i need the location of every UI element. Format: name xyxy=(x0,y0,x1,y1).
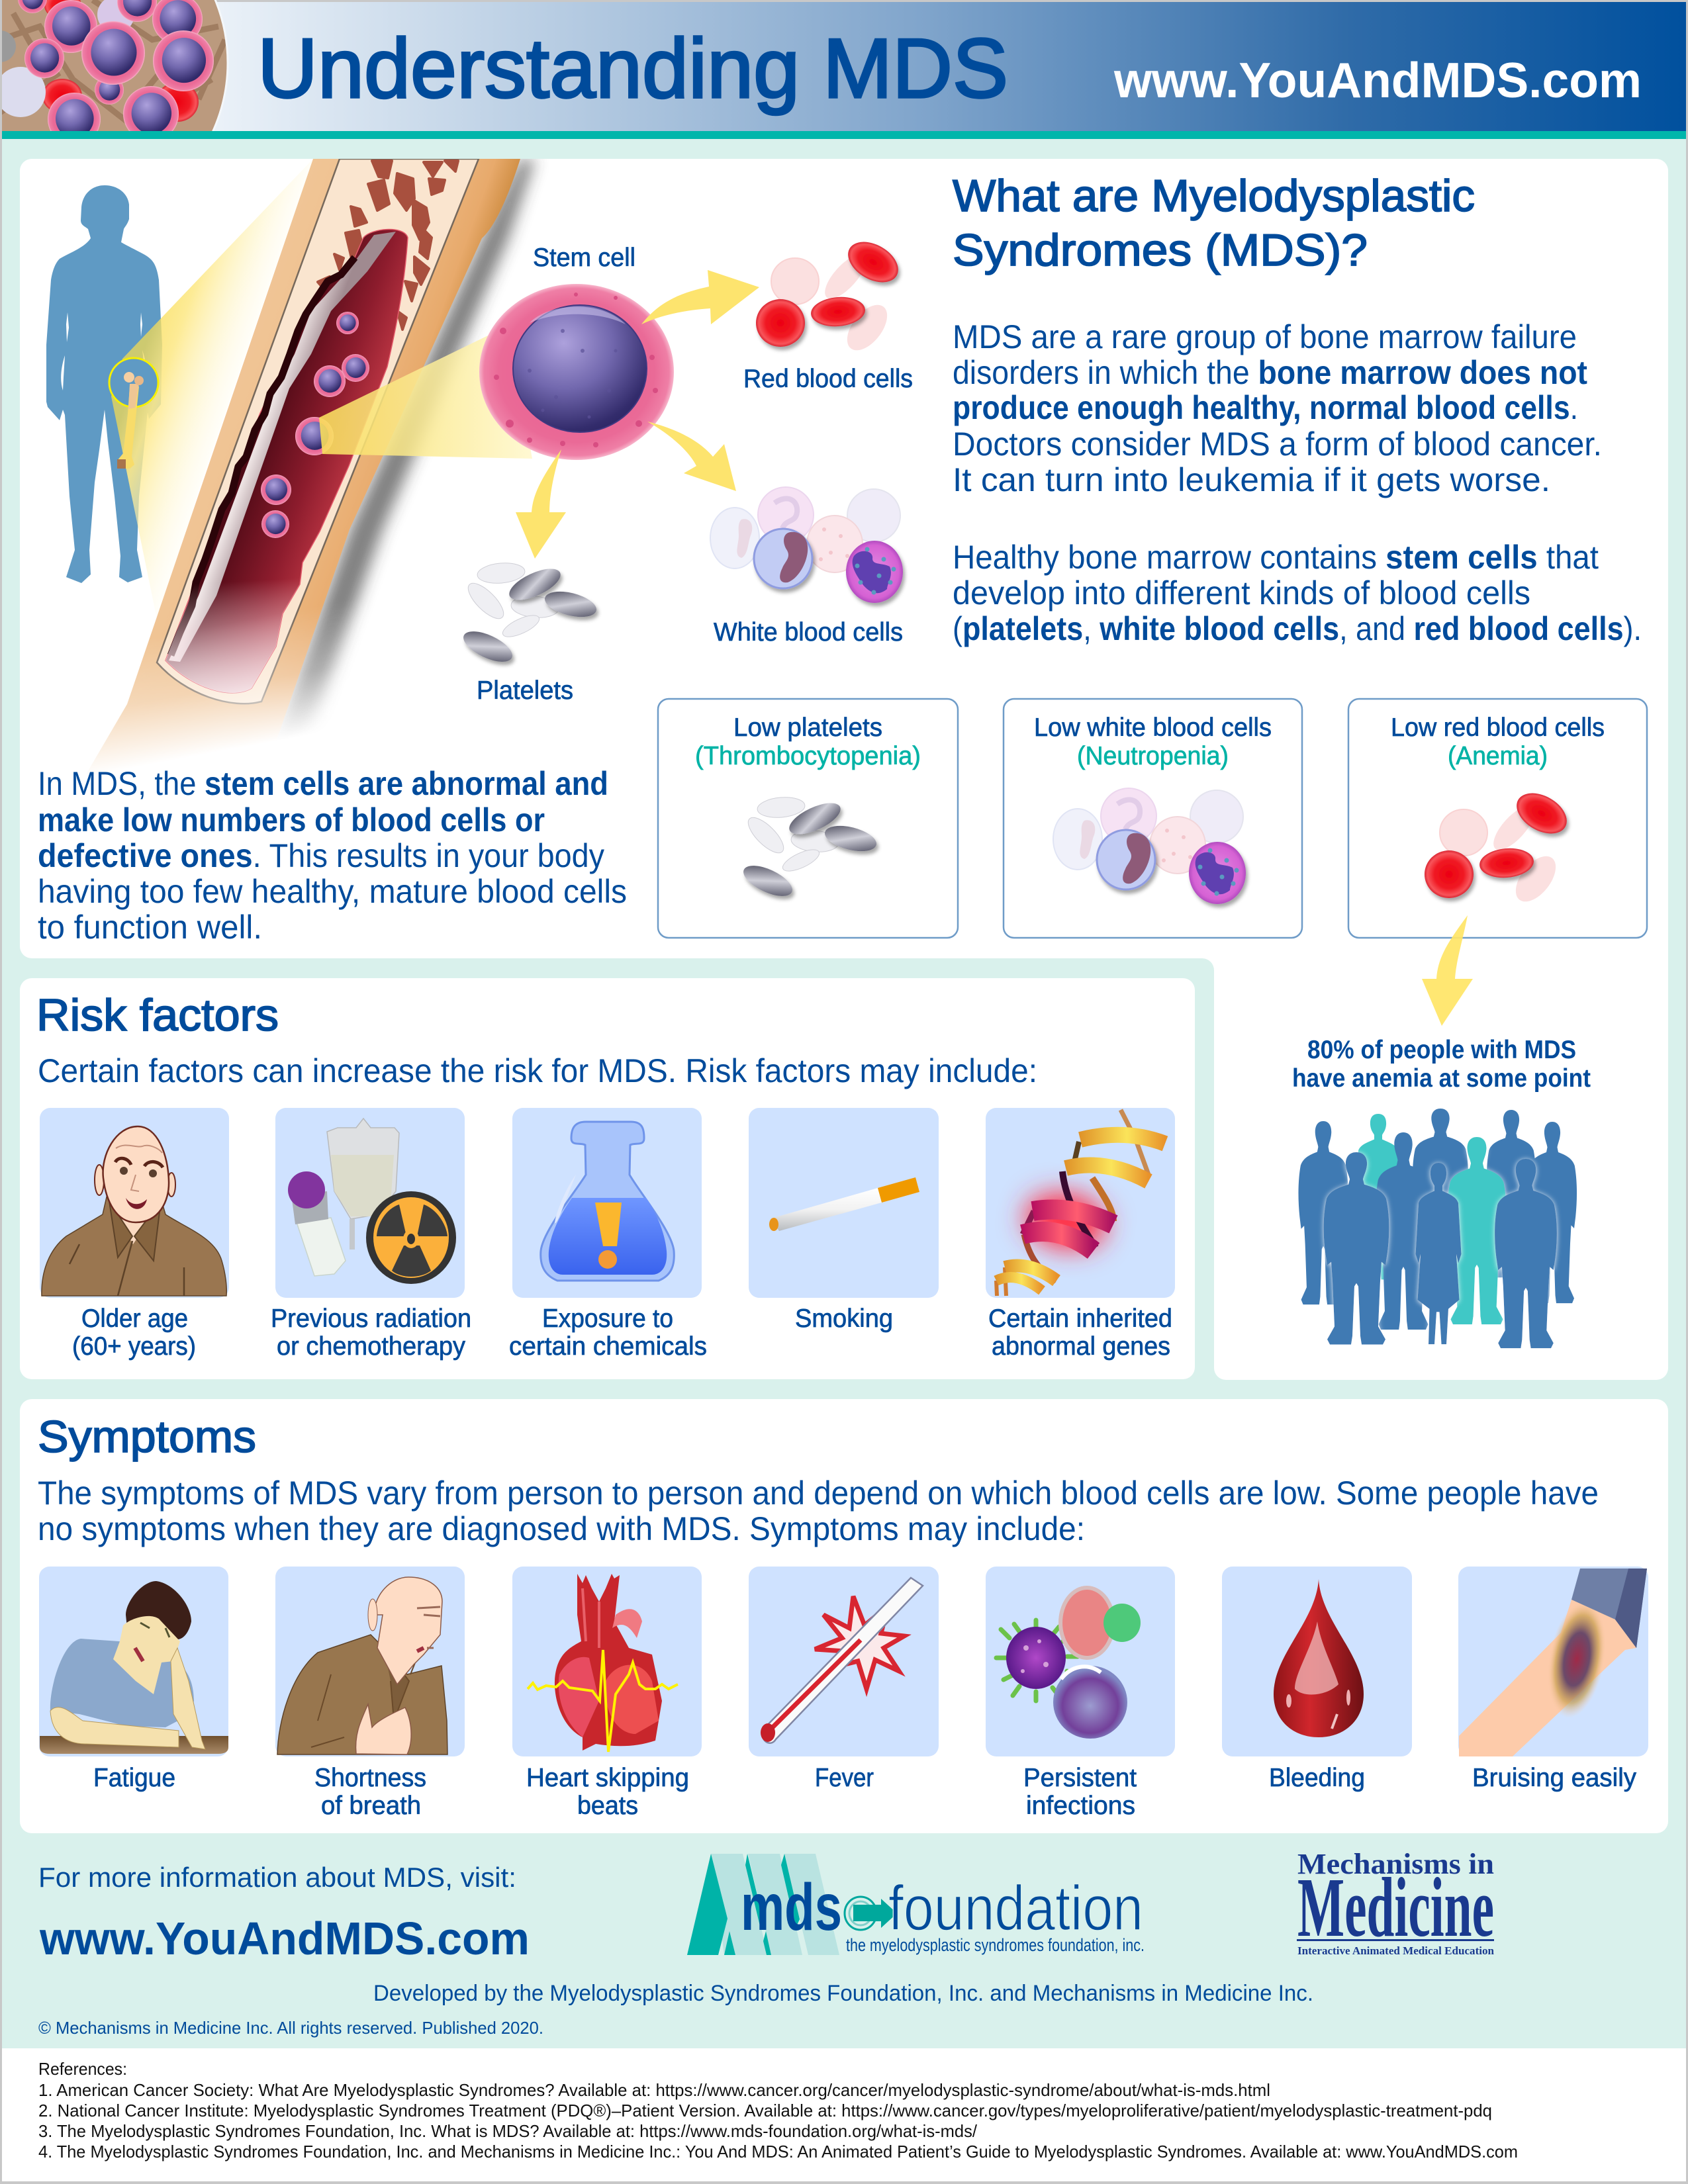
footer: more info: For more information about MDS, visit: xyxy=(38,1862,516,1893)
logo: MDS Foundation: the myelodysplastic syndromes foundation, inc. xyxy=(846,1935,1145,1955)
text: in MDS: having too few healthy, mature blood cells xyxy=(38,873,627,910)
panel: risk factors xyxy=(20,978,1195,1379)
risk: smoking xyxy=(749,1108,939,1298)
label: Heart skipping xyxy=(526,1764,689,1792)
panel: references: References: xyxy=(38,2059,127,2079)
header url: www.YouAndMDS.com xyxy=(1113,52,1642,108)
box: low platelets xyxy=(658,699,958,938)
bone cross-section xyxy=(86,159,535,774)
box: low platelets: (Thrombocytopenia) xyxy=(695,742,921,770)
label: Shortness xyxy=(314,1764,426,1792)
box: low red blood cells: (Anemia) xyxy=(1448,742,1548,770)
symptom: fever xyxy=(749,1567,939,1756)
label: Certain inherited xyxy=(988,1304,1172,1333)
box: low red blood cells: Low red blood cells xyxy=(1391,713,1605,742)
text: in MDS: to function well. xyxy=(38,909,262,946)
label xyxy=(72,1304,196,1361)
arrow: to white cells xyxy=(647,422,736,491)
blood vessel xyxy=(165,230,408,693)
panel: references: 1. American Cancer Society: What Are Myelodysplastic Syndromes? Available at: https://www.cancer.org/cancer/myelodysplastic-syndrome/about/what-is-mds.html xyxy=(38,2080,1270,2100)
arrow: to red cells xyxy=(641,270,759,324)
symptom: bleeding xyxy=(1222,1567,1412,1756)
header banner xyxy=(2,0,1686,139)
text: copyright: © Mechanisms in Medicine Inc. All rights reserved. Published 2020. xyxy=(38,2018,543,2038)
logo: Mechanisms in Medicine: Interactive Animated Medical Education xyxy=(1297,1944,1495,1957)
panel: references xyxy=(0,2048,1688,2184)
label: or chemotherapy xyxy=(277,1332,465,1361)
yellow beam to stem cell xyxy=(319,326,532,459)
arrow: to platelets xyxy=(516,449,566,559)
panel: references: 4. The Myelodysplastic Syndromes Foundation, Inc. and Mechanisms in Medicine Inc.: You And MDS: An Animated Patient’s Guide to Myelodysplastic Syndromes. Available at: www.YouAndMDS.com xyxy=(38,2142,1518,2161)
femur xyxy=(117,372,144,469)
text: in MDS: In MDS, the stem cells are abnormal and xyxy=(38,765,608,802)
icon: white blood cells xyxy=(710,487,903,603)
label xyxy=(314,1764,426,1820)
text: MDS definition: Doctors consider MDS a form of blood cancer. xyxy=(953,426,1602,463)
label: Bleeding xyxy=(1269,1764,1365,1792)
symptom: fatigue xyxy=(39,1567,228,1756)
heading: risk factors: Risk factors xyxy=(36,990,279,1040)
logo: Mechanisms in Medicine: Mechanisms in xyxy=(1297,1848,1494,1880)
text: healthy bone marrow: (platelets, white blood cells, and red blood cells). xyxy=(953,610,1642,647)
label xyxy=(509,1304,707,1361)
text: in MDS: make low numbers of blood cells or xyxy=(38,801,545,839)
risk: radiation or chemotherapy xyxy=(275,1108,465,1298)
label: red blood cells: Red blood cells xyxy=(743,365,913,393)
icon: red blood cells xyxy=(756,234,906,357)
logo: MDS Foundation: mds xyxy=(741,1870,842,1944)
label: white blood cells: White blood cells xyxy=(714,618,903,647)
symptom: infections xyxy=(986,1567,1175,1756)
logo: Mechanisms in Medicine xyxy=(1297,1848,1495,1957)
text: MDS definition: disorders in which the bone marrow does not xyxy=(953,354,1587,391)
footer: more info: www.YouAndMDS.com xyxy=(39,1913,530,1964)
arrow: anemia xyxy=(1422,915,1473,1026)
box: low white blood cells: Low white blood cells xyxy=(1034,713,1272,742)
panel: references: 3. The Myelodysplastic Syndromes Foundation, Inc. What is MDS? Available at: https://www.mds-foundation.org/what-is-mds/ xyxy=(38,2121,978,2141)
logo: Mechanisms in Medicine: Medicine xyxy=(1297,1860,1494,1954)
label: Persistent xyxy=(1023,1764,1137,1792)
text: healthy bone marrow: develop into different kinds of blood cells xyxy=(953,574,1530,612)
risk: chemicals xyxy=(512,1108,702,1298)
text: healthy bone marrow xyxy=(953,539,1642,647)
label xyxy=(988,1304,1172,1361)
text: risk intro: Certain factors can increase the risk for MDS. Risk factors may include: xyxy=(38,1052,1037,1089)
risk: genes xyxy=(986,1108,1175,1298)
heading: what are MDS: What are Myelodysplastic xyxy=(953,171,1475,221)
human silhouette with femur callout xyxy=(46,159,313,629)
box: low platelets: Low platelets xyxy=(733,713,882,742)
label: Fever xyxy=(815,1764,874,1792)
label: Exposure to xyxy=(542,1304,673,1333)
header image: bone marrow cells xyxy=(2,0,229,131)
text: symptoms intro: no symptoms when they are diagnosed with MDS. Symptoms may include: xyxy=(38,1510,1085,1547)
label: platelets: Platelets xyxy=(477,676,573,705)
label: beats xyxy=(577,1792,638,1820)
title: Understanding MDS xyxy=(258,21,1008,115)
panel: what are MDS xyxy=(20,159,1668,1380)
callout: 80 percent: have anemia at some point xyxy=(1292,1064,1591,1093)
heading: symptoms: Symptoms xyxy=(38,1412,256,1462)
label: certain chemicals xyxy=(509,1332,707,1361)
stem cells in vessel xyxy=(261,312,369,538)
label: Fatigue xyxy=(93,1764,175,1792)
box: low red blood cells xyxy=(1348,699,1647,938)
text: symptoms intro: The symptoms of MDS vary from person to person and depend on which blood cells are low. Some people have xyxy=(38,1475,1599,1512)
heading: what are MDS xyxy=(953,171,1475,275)
label: of breath xyxy=(321,1792,421,1820)
label: Bruising easily xyxy=(1472,1764,1636,1792)
icon: platelets xyxy=(459,561,599,668)
box: low white blood cells xyxy=(1004,699,1302,938)
footer: more info xyxy=(38,1862,530,1964)
text: developed by: Developed by the Myelodysplastic Syndromes Foundation, Inc. and Mechanisms in Medicine Inc. xyxy=(373,1981,1313,2006)
yellow zoom beam xyxy=(111,159,313,629)
spongy marrow holes xyxy=(318,161,458,330)
text: in MDS xyxy=(38,765,627,946)
label: infections xyxy=(1026,1792,1135,1820)
symptom: heart xyxy=(512,1567,702,1756)
risk: older age xyxy=(40,1108,229,1298)
symptom: bruising xyxy=(1458,1567,1648,1756)
text: in MDS: defective ones. This results in your body xyxy=(38,837,604,874)
label: (60+ years) xyxy=(72,1332,196,1361)
icon: stem cell xyxy=(479,284,674,460)
text: MDS definition: MDS are a rare group of bone marrow failure xyxy=(953,318,1577,355)
text: healthy bone marrow: Healthy bone marrow contains stem cells that xyxy=(953,539,1599,576)
callout: 80 percent: 80% of people with MDS xyxy=(1307,1036,1576,1064)
text: MDS definition: produce enough healthy, normal blood cells. xyxy=(953,389,1578,426)
label xyxy=(526,1764,689,1820)
logo: MDS Foundation xyxy=(687,1854,1145,1955)
symptom: shortness of breath xyxy=(275,1567,465,1756)
icon: group of people xyxy=(1298,1109,1577,1348)
label: Older age xyxy=(81,1304,188,1333)
highlight circle xyxy=(109,358,158,407)
panel: symptoms xyxy=(20,1399,1668,1833)
label xyxy=(1023,1764,1137,1820)
callout: 80 percent xyxy=(1292,1036,1591,1093)
label: abnormal genes xyxy=(992,1332,1170,1361)
panel: references: 2. National Cancer Institute: Myelodysplastic Syndromes Treatment (PDQ®)–Patient Version. Available at: https://www.cancer.gov/types/myeloproliferative/patient/myelodysplastic-treatment-pdq xyxy=(38,2101,1492,2120)
text: MDS definition: It can turn into leukemia if it gets worse. xyxy=(953,461,1550,498)
label: Smoking xyxy=(795,1304,893,1333)
label: Previous radiation xyxy=(271,1304,471,1333)
label xyxy=(271,1304,471,1361)
logo: MDS Foundation: foundation xyxy=(888,1873,1143,1944)
box: low white blood cells: (Neutropenia) xyxy=(1077,742,1229,770)
label: stem cell: Stem cell xyxy=(533,244,635,272)
text: symptoms intro xyxy=(38,1475,1599,1547)
heading: what are MDS: Syndromes (MDS)? xyxy=(953,225,1368,275)
text: MDS definition xyxy=(953,318,1602,498)
